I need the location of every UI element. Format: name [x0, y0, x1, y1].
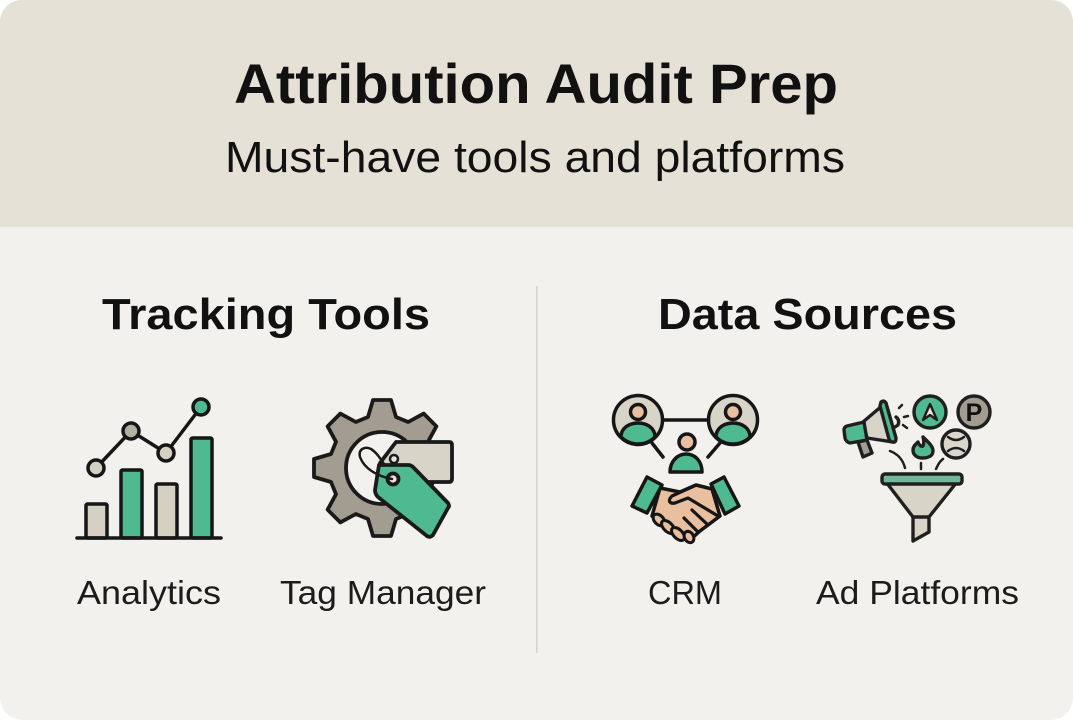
label: Analytics: Analytics	[77, 574, 221, 611]
heading: Tracking Tools: Tracking Tools	[102, 290, 430, 339]
panel: header band	[0, 0, 1073, 227]
title: Attribution Audit Prep	[234, 52, 838, 115]
label: CRM: CRM	[648, 574, 722, 611]
subtitle: Must-have tools and platforms	[225, 133, 845, 182]
label: Ad Platforms: Ad Platforms	[816, 574, 1019, 611]
divider between sections	[536, 286, 538, 653]
icon: gear and tags	[314, 400, 452, 537]
heading: Data Sources: Data Sources	[658, 290, 957, 339]
label: Tag Manager: Tag Manager	[280, 574, 486, 611]
icon: CRM people and handshake	[614, 396, 758, 544]
icon: analytics chart	[77, 399, 221, 538]
icon: megaphone, platform badges and funnel	[844, 396, 990, 541]
badge letter: P: P	[966, 399, 982, 427]
